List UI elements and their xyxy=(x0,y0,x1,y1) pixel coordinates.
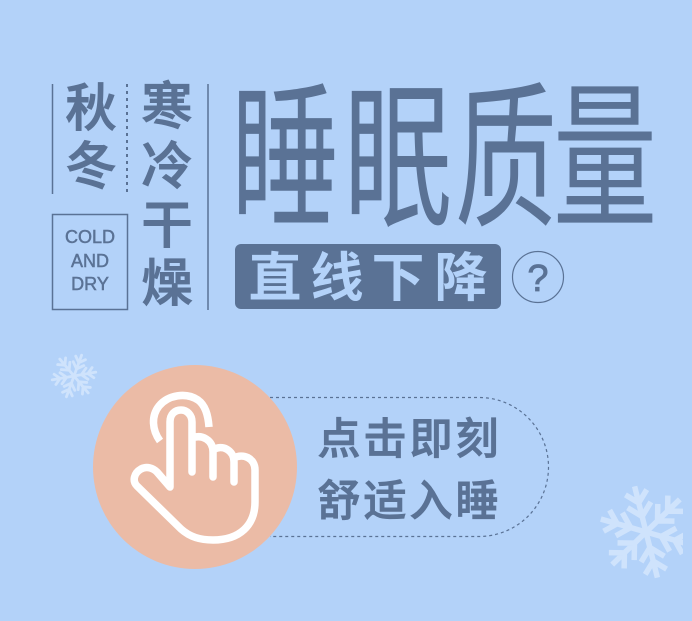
heading: cold and dry chinese: 干 xyxy=(141,197,193,254)
call to action text: 击 xyxy=(364,416,406,464)
banner: dropping sharply: 直 xyxy=(248,249,302,308)
heading: cold and dry chinese xyxy=(141,78,193,312)
peach circle xyxy=(93,365,297,569)
badge: cold and dry: COLD xyxy=(65,227,115,247)
title: sleep quality xyxy=(231,70,657,248)
call to action text xyxy=(318,416,498,526)
icon: large snowflake xyxy=(600,486,683,578)
icon: question mark: ? xyxy=(527,258,549,300)
badge: cold and dry: DRY xyxy=(71,274,109,294)
badge: cold and dry: AND xyxy=(71,251,109,271)
badge: cold and dry xyxy=(52,214,128,310)
banner: dropping sharply: 降 xyxy=(434,249,488,308)
banner: dropping sharply xyxy=(235,244,501,309)
heading: autumn winter: 冬 xyxy=(65,138,117,195)
left rule xyxy=(52,84,54,194)
icon: tapping hand xyxy=(134,395,255,540)
call to action text: 睡 xyxy=(456,478,498,526)
call to action text: 点 xyxy=(318,416,360,464)
title: sleep quality: 眠 xyxy=(344,70,452,248)
call to action text: 刻 xyxy=(456,416,498,464)
call to action outline xyxy=(270,398,548,536)
banner: dropping sharply: 线 xyxy=(310,249,364,308)
call to action text: 适 xyxy=(364,478,406,526)
title: sleep quality: 质 xyxy=(455,73,557,248)
call to action text: 即 xyxy=(410,416,452,464)
heading: cold and dry chinese: 冷 xyxy=(141,138,193,195)
heading: autumn winter: 秋 xyxy=(65,80,117,137)
title: sleep quality: 睡 xyxy=(231,70,339,248)
banner: dropping sharply: 下 xyxy=(372,249,424,308)
dotted divider xyxy=(126,84,128,195)
icon: question mark xyxy=(512,252,564,302)
call to action text: 入 xyxy=(410,478,452,526)
heading: cold and dry chinese: 燥 xyxy=(141,255,193,312)
right rule xyxy=(207,84,209,310)
heading: autumn winter xyxy=(65,80,117,195)
icon: small snowflake xyxy=(51,353,97,399)
heading: cold and dry chinese: 寒 xyxy=(141,78,193,135)
call to action text: 舒 xyxy=(318,478,360,526)
title: sleep quality: 量 xyxy=(553,72,657,248)
